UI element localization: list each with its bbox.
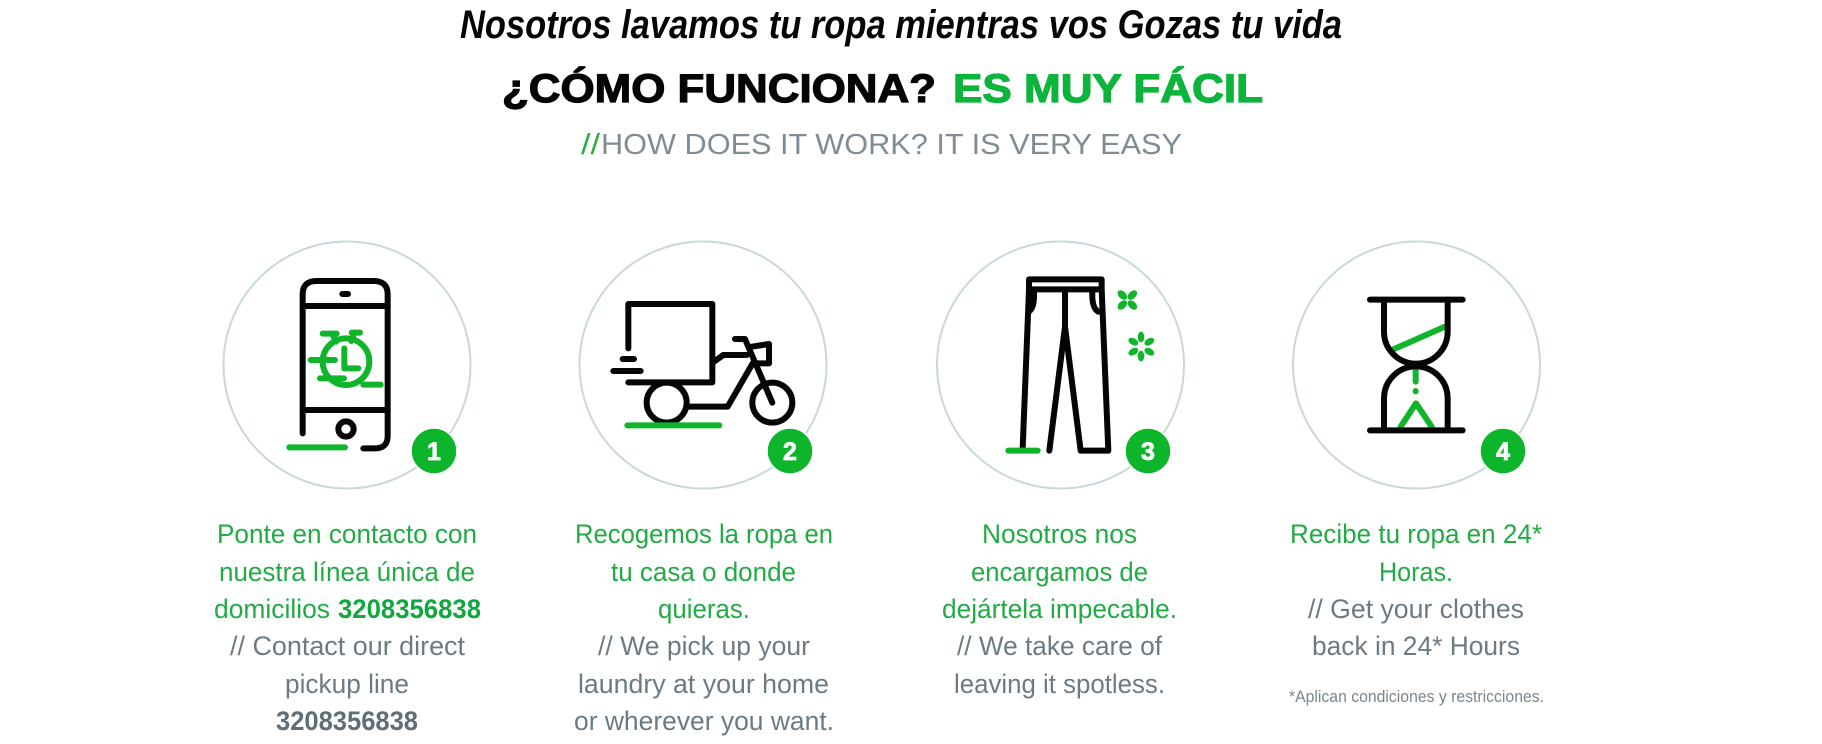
text: step 1: pickup line bbox=[285, 669, 409, 699]
badge 1 bbox=[411, 428, 457, 474]
text: step 4 bbox=[1290, 519, 1542, 661]
heading bbox=[502, 65, 1263, 111]
badge 1: 1 bbox=[427, 438, 441, 466]
text: step 1: 3208356838 bbox=[338, 594, 481, 624]
panel: step 2 bbox=[574, 242, 834, 736]
text: step 1: nuestra línea única de bbox=[219, 557, 475, 587]
text: step 3: leaving it spotless. bbox=[954, 669, 1165, 699]
text: step 1: // Contact our direct bbox=[230, 631, 465, 661]
title: Nosotros lavamos tu ropa mientras vos Gozas tu vida bbox=[460, 3, 1342, 47]
text: step 2: quieras. bbox=[658, 594, 750, 624]
badge 2: 2 bbox=[783, 438, 797, 466]
icon: delivery motorcycle bbox=[613, 304, 792, 425]
subheading: HOW DOES IT WORK? IT IS VERY EASY bbox=[601, 129, 1182, 161]
text: step 4: // Get your clothes bbox=[1308, 594, 1524, 624]
text: step 4: Recibe tu ropa en 24* bbox=[1290, 519, 1542, 549]
text: step 2: laundry at your home bbox=[578, 669, 829, 699]
badge 2 bbox=[767, 428, 813, 474]
text: step 1: 3208356838 bbox=[276, 706, 418, 736]
icon: phone with clock bbox=[289, 281, 388, 448]
text: step 4: Horas. bbox=[1379, 557, 1453, 587]
text: step 2: tu casa o donde bbox=[611, 557, 796, 587]
text: step 3: encargamos de bbox=[971, 557, 1148, 587]
text: step 1: domicilios bbox=[214, 594, 330, 624]
circle 3 bbox=[937, 242, 1184, 488]
badge 3 bbox=[1125, 428, 1171, 474]
circle 1 bbox=[224, 242, 470, 488]
text: step 2: Recogemos la ropa en bbox=[575, 519, 833, 549]
text: step 3 bbox=[942, 519, 1177, 699]
heading: ES MUY FÁCIL bbox=[953, 66, 1263, 111]
text: step 2 bbox=[574, 519, 834, 736]
text: step 3: // We take care of bbox=[957, 631, 1162, 661]
footnote: *Aplican condiciones y restricciones. bbox=[1289, 687, 1544, 706]
text: step 2: or wherever you want. bbox=[574, 706, 834, 736]
text: step 1 bbox=[214, 519, 481, 736]
panel: step 4 bbox=[1289, 242, 1544, 706]
panel: step 1 bbox=[214, 242, 481, 736]
text: step 2: // We pick up your bbox=[598, 631, 810, 661]
icon: hourglass bbox=[1370, 300, 1463, 430]
heading: ¿CÓMO FUNCIONA? bbox=[502, 65, 936, 111]
text: step 4: back in 24* Hours bbox=[1312, 631, 1520, 661]
text: step 3: Nosotros nos bbox=[982, 519, 1137, 549]
subheading: // bbox=[581, 129, 601, 161]
text: step 1: Ponte en contacto con bbox=[217, 519, 477, 549]
badge 4 bbox=[1480, 428, 1526, 474]
text: step 3: dejártela impecable. bbox=[942, 594, 1177, 624]
panel: step 3 bbox=[937, 242, 1184, 699]
badge 4: 4 bbox=[1496, 438, 1510, 466]
badge 3: 3 bbox=[1141, 438, 1155, 466]
circle 2 bbox=[580, 242, 826, 488]
circle 4 bbox=[1293, 242, 1540, 488]
icon: trousers bbox=[1008, 279, 1156, 451]
